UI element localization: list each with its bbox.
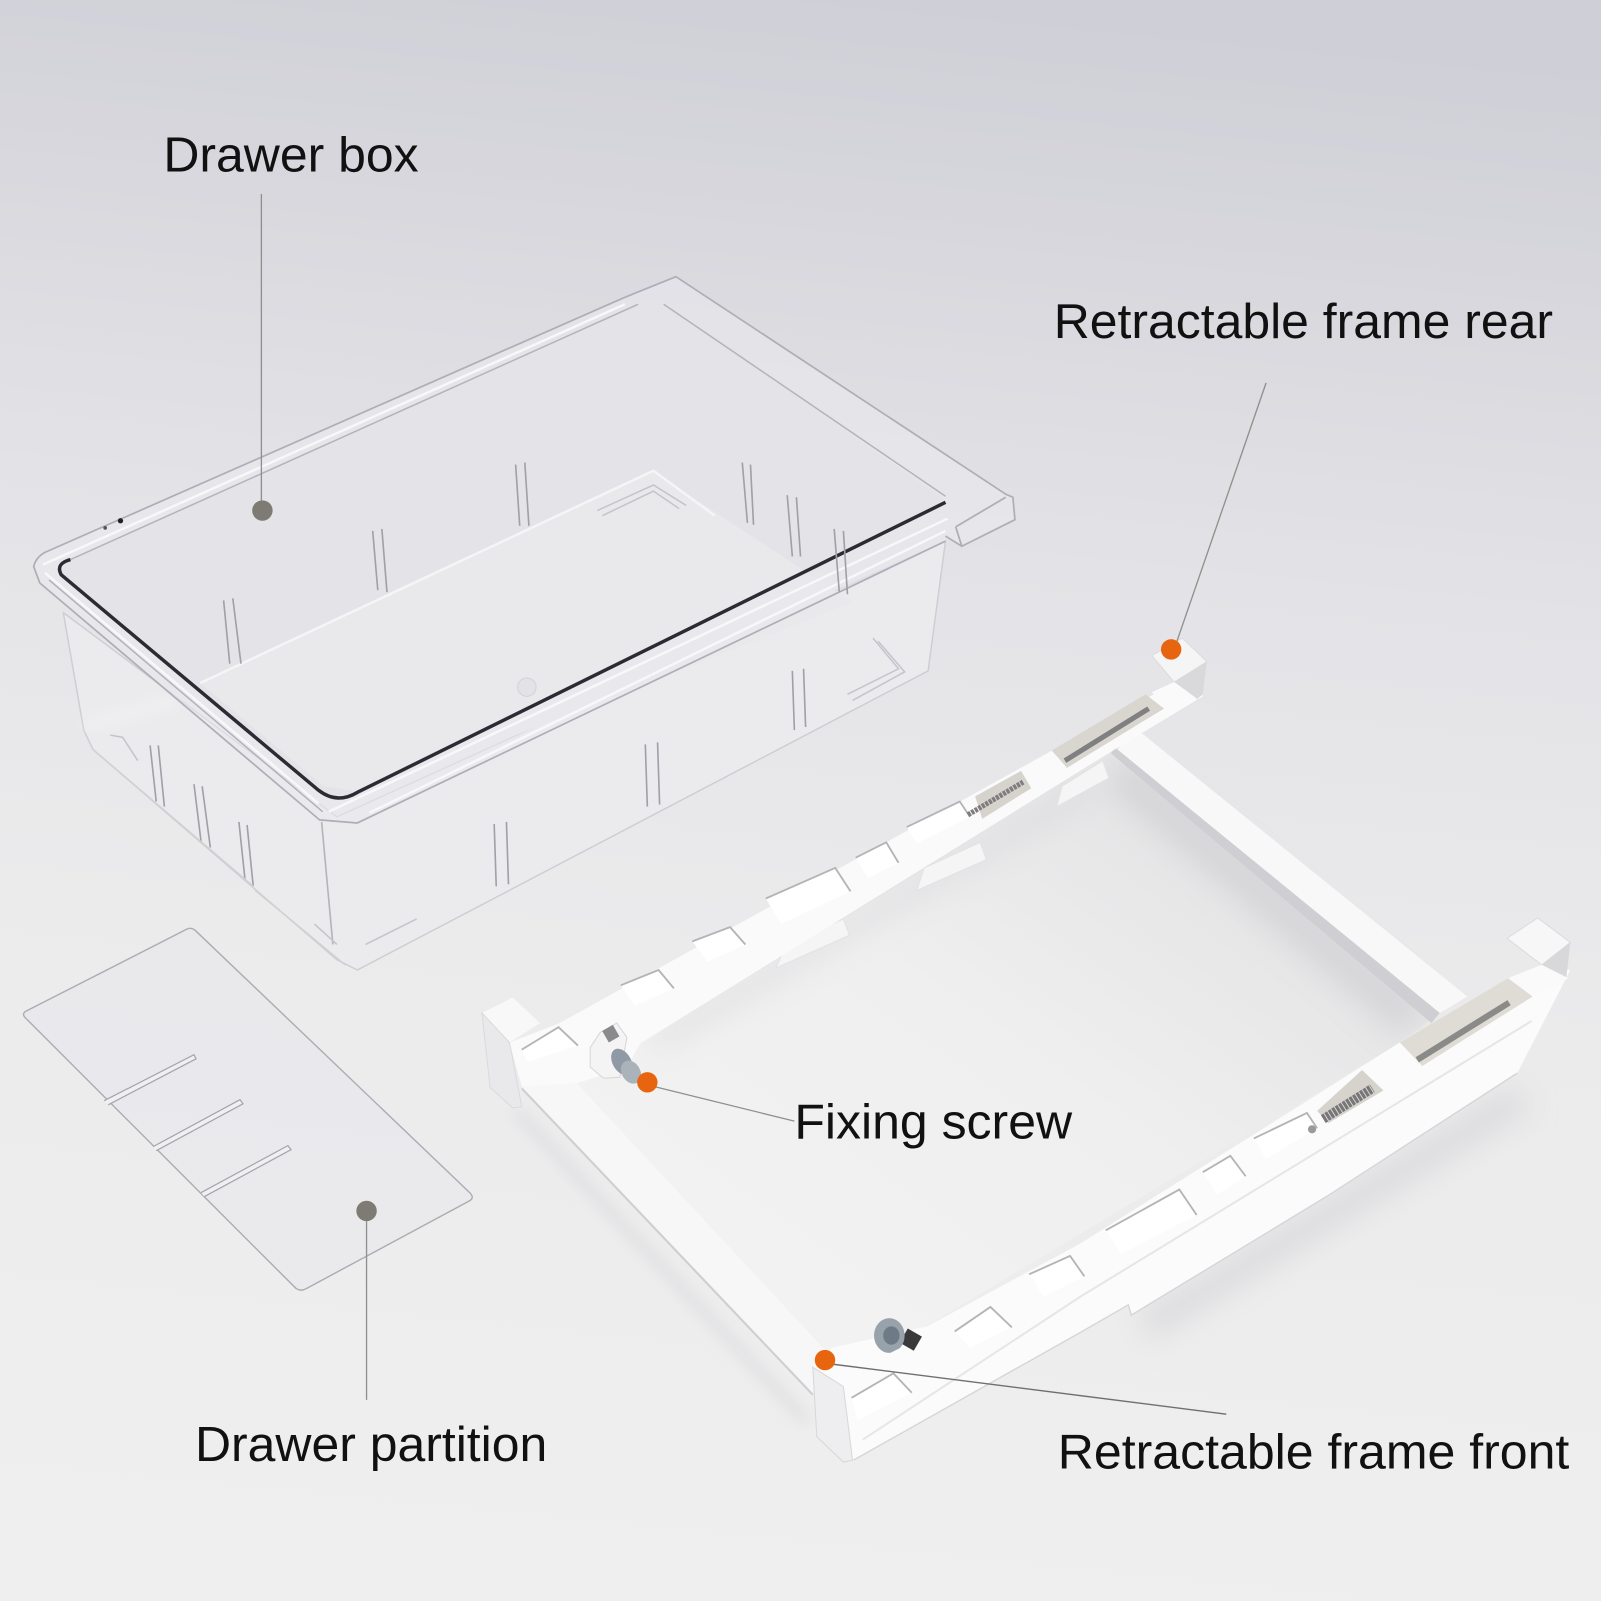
frame cross bar xyxy=(1111,733,1467,1017)
callout: drawer box: Drawer box xyxy=(163,129,419,183)
callout: retractable frame rear xyxy=(1054,295,1553,660)
drawer corner marks xyxy=(110,485,905,944)
frame front rail xyxy=(813,965,1570,1462)
frame springs xyxy=(968,694,1533,1133)
drawer rim xyxy=(34,277,1015,823)
callout: fixing screw xyxy=(637,1072,1073,1149)
drawer body xyxy=(63,541,945,970)
drawer ribs xyxy=(150,463,847,886)
callout: retractable frame front: Retractable frame front xyxy=(1058,1425,1570,1479)
drawer interior xyxy=(59,304,944,796)
screw rear xyxy=(590,1023,645,1087)
callout: drawer box xyxy=(163,129,419,521)
callout: fixing screw: Fixing screw xyxy=(794,1095,1073,1149)
callout: retractable frame rear: Retractable frame rear xyxy=(1054,295,1553,349)
frame caps xyxy=(482,998,540,1042)
drawer floor xyxy=(200,472,853,791)
black gasket xyxy=(60,502,945,798)
callout: drawer partition xyxy=(195,1201,547,1472)
partition slots xyxy=(104,1055,291,1197)
screw front xyxy=(874,1318,922,1373)
callout: drawer partition: Drawer partition xyxy=(195,1418,547,1472)
frame sheet xyxy=(522,756,1434,1393)
frame plate edge xyxy=(522,1083,837,1393)
front hook xyxy=(1507,918,1570,965)
callout: retractable frame front xyxy=(815,1350,1570,1479)
frame windows xyxy=(522,802,1317,1420)
window edges xyxy=(522,802,1317,1398)
drawer partition xyxy=(23,928,472,1290)
frame shadows xyxy=(516,1111,807,1421)
retractable frame xyxy=(482,638,1570,1462)
frame rear rail xyxy=(510,674,1203,1086)
drawer box xyxy=(34,277,1015,970)
rear hook xyxy=(1152,638,1207,682)
rail tabs xyxy=(776,761,1109,968)
